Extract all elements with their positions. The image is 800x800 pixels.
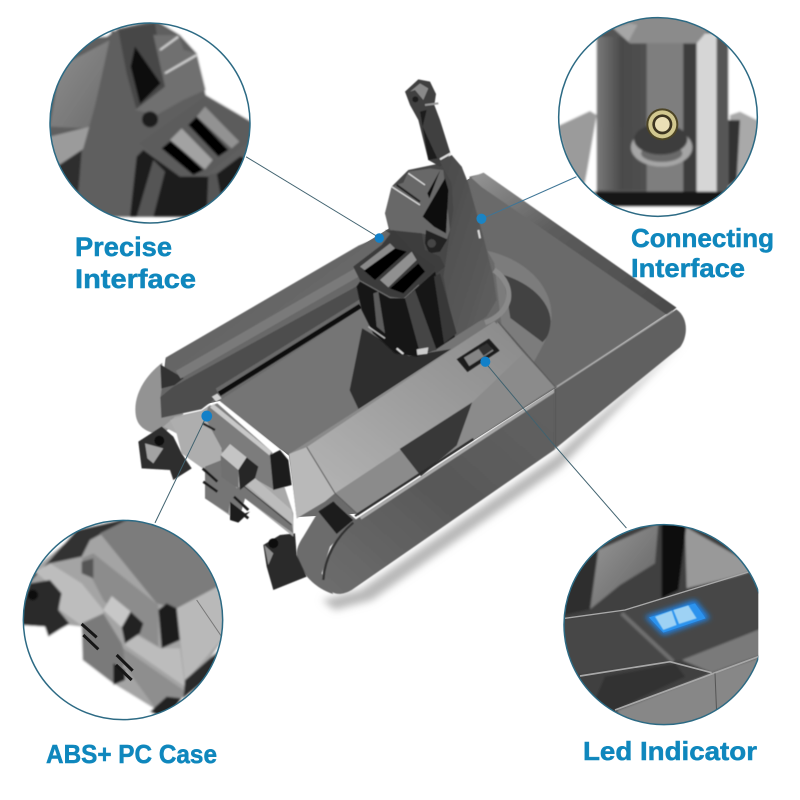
detail circle: precise interface — [40, 20, 260, 223]
socket — [353, 230, 435, 298]
detail circle: connecting interface — [558, 16, 758, 218]
upper block — [385, 168, 450, 240]
heading: led indicator: Led Indicator — [583, 736, 757, 766]
leader line: led — [485, 363, 626, 528]
connector block — [138, 393, 307, 590]
lower dark body — [385, 230, 445, 287]
leader line: connecting interface — [484, 177, 576, 218]
handle arm — [405, 79, 451, 167]
heading: abs pc case: ABS+ PC Case — [46, 739, 217, 769]
marker dot: connecting interface — [476, 214, 486, 224]
body silhouette — [162, 175, 675, 517]
rear curved edge and top plate — [135, 232, 391, 435]
detail circle: abs pc case — [20, 517, 227, 723]
detail circle: led indicator — [563, 524, 758, 726]
front light panels — [289, 321, 555, 518]
window — [423, 178, 448, 233]
leader lines and markers — [155, 157, 626, 528]
main battery — [135, 173, 676, 518]
leader line: case — [155, 418, 206, 523]
heading: precise interface line 2: Interface — [75, 264, 196, 294]
cylinder — [357, 272, 455, 357]
led glow — [645, 600, 710, 635]
leader line: precise interface — [246, 157, 376, 236]
marker dot: led — [480, 357, 490, 367]
lower side wall and end cap — [297, 389, 555, 594]
heading: connecting interface: Connecting — [631, 223, 774, 253]
battery drop shadow — [322, 340, 685, 610]
neck silhouette — [385, 163, 497, 337]
right top plate with recess — [469, 173, 676, 402]
marker dot: precise interface — [375, 233, 384, 243]
right body side wall — [555, 309, 686, 449]
LED indicator — [457, 339, 500, 372]
neck and socket — [353, 79, 509, 357]
central flat surface — [219, 309, 494, 454]
recess ring — [485, 270, 509, 323]
marker dot: case — [201, 411, 212, 422]
neck front — [440, 155, 497, 337]
heading: precise interface: Precise — [75, 232, 172, 262]
heading: connecting interface line 2: Interface — [631, 253, 745, 283]
